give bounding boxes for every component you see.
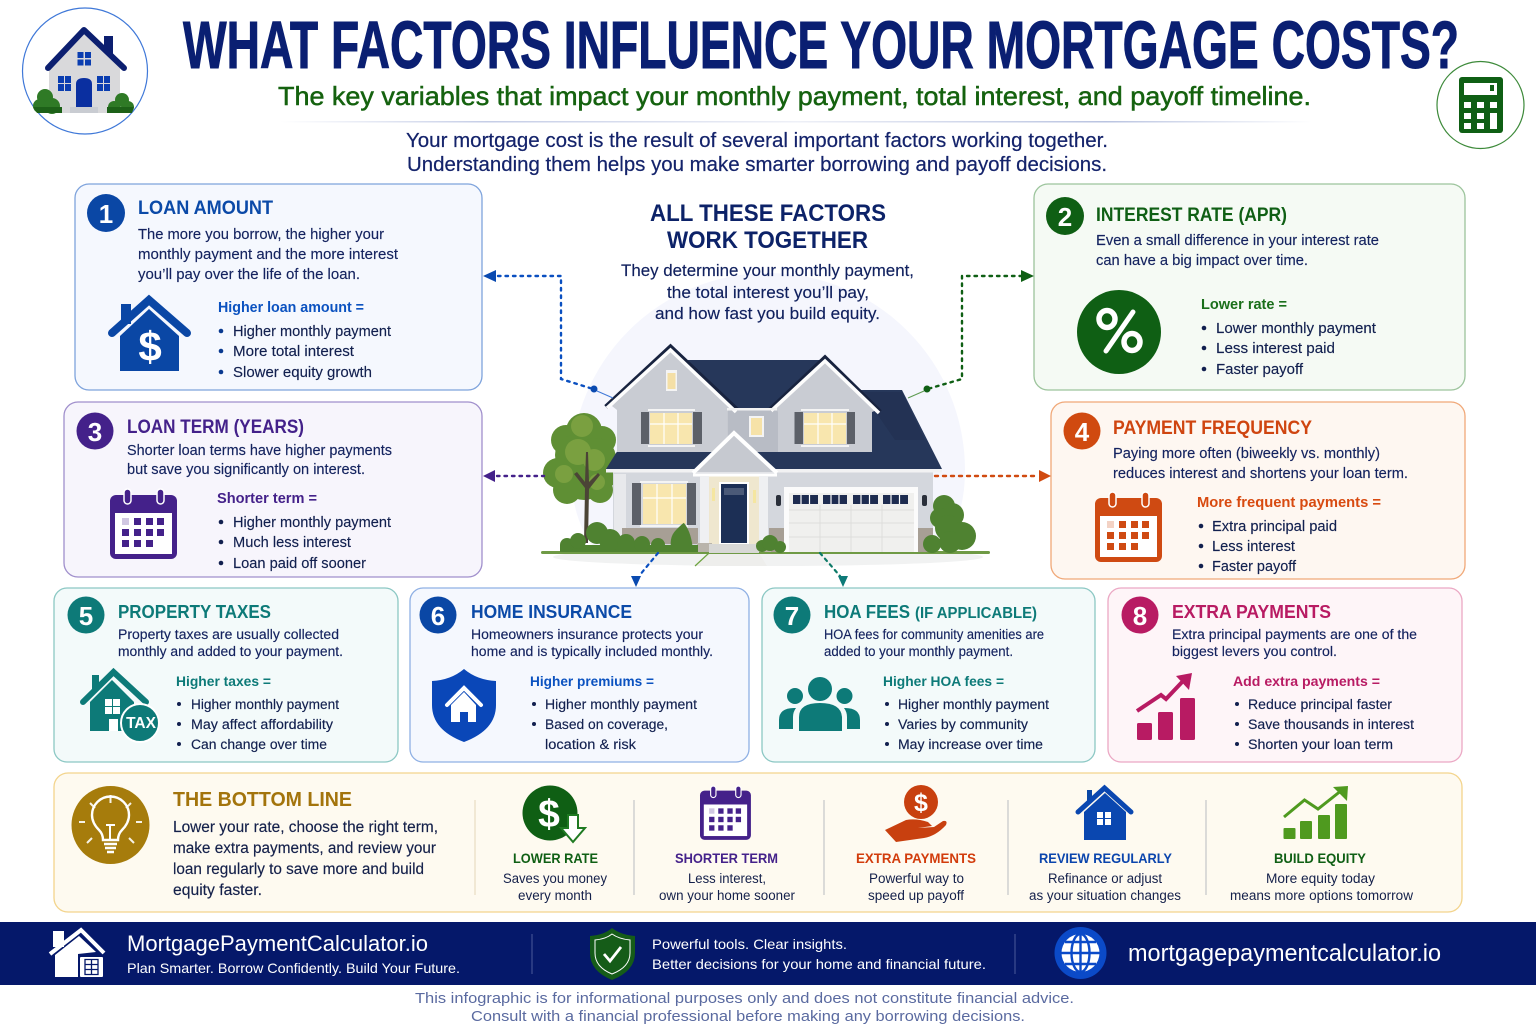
effects list: Shorter term = (217, 491, 317, 507)
effects list: Higher monthly payment (191, 697, 339, 712)
tip: review regularly: Refinance or adjust (1048, 871, 1162, 886)
number badge 2: 2 (1058, 202, 1072, 232)
effects list: Higher loan amount = (218, 300, 364, 316)
icon: rising bar chart (1137, 673, 1195, 740)
effects list: Extra principal paid (1212, 518, 1337, 535)
effects list (1197, 495, 1381, 575)
tip: shorter term: SHORTER TERM (675, 850, 778, 866)
icon: calculator in circle (1437, 62, 1524, 148)
tip: build equity: BUILD EQUITY (1274, 850, 1367, 866)
heading: property taxes: PROPERTY TAXES (118, 601, 271, 622)
icon: house with tax badge (83, 672, 159, 742)
disclaimer: This infographic is for informational purposes only and does not constitute financial advice. (415, 990, 1074, 1007)
footer message: Powerful tools. Clear insights. (652, 936, 847, 952)
porch (702, 476, 766, 544)
tip: extra payments: Powerful way to (869, 871, 964, 886)
panel: 6 home insurance (410, 588, 749, 762)
intro text: Your mortgage cost is the result of several important factors working together. (406, 130, 1108, 152)
tip: review regularly (1029, 788, 1181, 903)
intro text: Understanding them helps you make smarter borrowing and payoff decisions. (407, 154, 1107, 176)
description: Shorter loan terms have higher payments (127, 442, 392, 459)
description (127, 442, 392, 478)
description (1096, 232, 1379, 269)
tree (543, 413, 617, 543)
center heading and text: the total interest you’ll pay, (667, 284, 869, 302)
effects list: Less interest paid (1216, 340, 1335, 357)
icon: dollar with down arrow: $ (538, 793, 560, 836)
description (1172, 627, 1417, 659)
number badge 4: 4 (1075, 417, 1090, 447)
effects list: Can change over time (191, 737, 327, 752)
effects list: Faster payoff (1216, 361, 1304, 378)
brand name: MortgagePaymentCalculator.io (127, 931, 428, 956)
description: added to your monthly payment. (824, 644, 1013, 659)
website: mortgagepaymentcalculator.io (1128, 940, 1441, 967)
icon: footer house logo (50, 930, 104, 977)
arrow: house to payment frequency (935, 470, 1051, 482)
icon: blue house (1078, 788, 1131, 840)
description: The more you borrow, the higher your (138, 226, 384, 243)
intro text (406, 130, 1108, 176)
tip: extra payments (856, 785, 976, 903)
icon: house in circle (22, 8, 148, 134)
description: home and is typically included monthly. (471, 644, 713, 659)
tip: build equity (1230, 786, 1413, 903)
bottom line text: make extra payments, and review your (173, 840, 436, 857)
panel: the bottom line (54, 773, 1462, 912)
arrow: house to home insurance (631, 553, 658, 587)
tip: build equity: means more options tomorrow (1230, 888, 1413, 903)
tip: shorter term: Less interest, (688, 871, 766, 886)
tip: lower rate: LOWER RATE (513, 850, 598, 866)
heading: the bottom line: THE BOTTOM LINE (173, 788, 352, 811)
description: Extra principal payments are one of the (1172, 627, 1417, 642)
description (118, 627, 343, 659)
heading: extra payments: EXTRA PAYMENTS (1172, 601, 1331, 622)
effects list (176, 673, 339, 752)
description: biggest levers you control. (1172, 644, 1337, 659)
heading: hoa fees: (IF APPLICABLE) (915, 605, 1037, 622)
effects list (217, 491, 392, 572)
number badge 7 (774, 596, 810, 634)
upper walls (617, 408, 872, 452)
effects list: Varies by community (898, 717, 1028, 732)
description: Paying more often (biweekly vs. monthly) (1113, 445, 1380, 462)
lower walls (613, 472, 933, 552)
heading: interest rate: INTEREST RATE (APR) (1096, 205, 1287, 226)
effects list (1233, 673, 1414, 752)
effects list: Based on coverage, (545, 717, 668, 732)
icon: house with dollar (112, 300, 187, 371)
tip: shorter term: own your home sooner (659, 888, 795, 903)
effects list: Higher monthly payment (545, 697, 697, 712)
number badge 5: 5 (79, 601, 93, 631)
description: can have a big impact over time. (1096, 252, 1308, 269)
number badge 8 (1122, 596, 1158, 634)
bottom line text (173, 819, 438, 899)
center heading and text: They determine your monthly payment, (621, 262, 914, 280)
effects list (530, 673, 697, 752)
effects list: More frequent payments = (1197, 495, 1381, 511)
description (138, 226, 399, 283)
arrow: house to loan amount (483, 270, 613, 398)
tip: lower rate: every month (518, 888, 592, 903)
effects list: Add extra payments = (1233, 673, 1380, 689)
heading: loan term: LOAN TERM (YEARS) (127, 417, 304, 438)
description: monthly and added to your payment. (118, 644, 343, 659)
tip: lower rate: Saves you money (503, 871, 607, 886)
panel: 1 loan amount (75, 184, 482, 390)
arrow: house to hoa fees (820, 553, 848, 587)
tip: extra payments: speed up payoff (868, 888, 964, 903)
tip: review regularly: REVIEW REGULARLY (1039, 850, 1173, 866)
description: reduces interest and shortens your loan term. (1113, 465, 1408, 482)
number badge 1 (87, 194, 125, 232)
effects list: May increase over time (898, 737, 1043, 752)
heading: hoa fees: HOA FEES (824, 601, 910, 622)
description: but save you significantly on interest. (127, 461, 365, 478)
icon: green shield (590, 928, 635, 980)
footer message: Better decisions for your home and financial future. (652, 956, 986, 972)
icon: shield with house (432, 669, 496, 742)
effects list (883, 673, 1049, 752)
description: Property taxes are usually collected (118, 627, 339, 642)
icon: hand with coin: $ (914, 789, 928, 817)
effects list: Higher monthly payment (233, 514, 392, 531)
effects list: Higher monthly payment (898, 697, 1049, 712)
subtitle: The key variables that impact your monthly payment, total interest, and payoff timeline. (278, 81, 1311, 111)
icon: purple calendar (110, 489, 177, 559)
effects list: Shorten your loan term (1248, 737, 1393, 752)
heading: loan amount: LOAN AMOUNT (138, 198, 273, 219)
description (471, 627, 713, 659)
effects list: Save thousands in interest (1248, 717, 1414, 732)
effects list: Slower equity growth (233, 364, 372, 381)
center heading and text (621, 200, 914, 323)
effects list: Lower monthly payment (1216, 320, 1377, 337)
heading: hoa fees (824, 601, 1037, 622)
description: you’ll pay over the life of the loan. (138, 266, 360, 283)
panel: 5 property taxes (54, 588, 398, 762)
arrow: house to loan term (483, 470, 544, 482)
number badge 8: 8 (1133, 601, 1147, 631)
heading: payment frequency: PAYMENT FREQUENCY (1113, 418, 1312, 439)
tip: extra payments: EXTRA PAYMENTS (856, 850, 976, 866)
icon: light bulb (72, 786, 150, 864)
center heading and text: WORK TOGETHER (667, 227, 868, 254)
bottom line text: loan regularly to save more and build (173, 861, 424, 878)
icon: orange calendar (1095, 492, 1162, 562)
effects list: Much less interest (233, 534, 352, 551)
footer band (0, 922, 1536, 985)
icon: calendar small (700, 786, 751, 840)
bottom line text: equity faster. (173, 882, 262, 899)
effects list: Less interest (1212, 538, 1296, 555)
effects list: Higher taxes = (176, 673, 271, 689)
effects list: location & risk (545, 737, 636, 752)
icon: globe (1054, 927, 1106, 979)
tagline: Plan Smarter. Borrow Confidently. Build Your Future. (127, 960, 460, 976)
number badge 3: 3 (88, 417, 102, 447)
disclaimer (415, 990, 1074, 1024)
description: monthly payment and the more interest (138, 246, 399, 263)
number badge 6: 6 (431, 601, 445, 631)
garage (784, 487, 918, 552)
panel: 7 hoa fees (762, 588, 1095, 762)
panel: 2 interest rate (1034, 184, 1465, 390)
number badge 4 (1064, 412, 1100, 450)
effects list (218, 300, 392, 381)
number badge 2 (1046, 197, 1084, 235)
tip: review regularly: as your situation changes (1029, 888, 1181, 903)
description: Homeowners insurance protects your (471, 627, 704, 642)
description: Even a small difference in your interest rate (1096, 232, 1379, 249)
tip: build equity: More equity today (1266, 871, 1375, 886)
effects list: Faster payoff (1212, 558, 1297, 575)
windows upper (641, 370, 855, 447)
number badge 7: 7 (785, 601, 799, 631)
panel: 4 payment frequency (1051, 402, 1465, 579)
description (1113, 445, 1408, 482)
effects list (1201, 297, 1377, 378)
heading: home insurance: HOME INSURANCE (471, 601, 632, 622)
footer message (652, 936, 986, 972)
description: HOA fees for community amenities are (824, 627, 1044, 642)
illustration: house (541, 273, 990, 566)
effects list: More total interest (233, 343, 355, 360)
center heading and text: ALL THESE FACTORS (650, 200, 886, 227)
number badge 3 (76, 412, 114, 450)
effects list: Lower rate = (1201, 297, 1287, 313)
panel: 3 loan term (64, 402, 482, 577)
effects list: Higher monthly payment (233, 323, 392, 340)
arrow: house to interest rate (908, 270, 1034, 398)
icon: house with dollar: $ (138, 323, 162, 370)
bottom line text: Lower your rate, choose the right term, (173, 819, 438, 836)
tip: lower rate (503, 786, 607, 903)
effects list: Higher premiums = (530, 673, 654, 689)
effects list: Reduce principal faster (1248, 697, 1393, 712)
tip: shorter term (659, 786, 795, 903)
icon: house with tax badge: TAX (126, 715, 157, 732)
number badge 5 (68, 596, 104, 634)
effects list: Higher HOA fees = (883, 673, 1004, 689)
shrubs (560, 495, 976, 553)
description (824, 627, 1044, 659)
icon: green chart (1284, 786, 1348, 839)
center heading and text: and how fast you build equity. (655, 305, 880, 323)
effects list: Loan paid off sooner (233, 555, 366, 572)
icon: percent (1077, 290, 1161, 374)
icon: people (779, 677, 860, 731)
number badge 1: 1 (99, 199, 113, 229)
number badge 6 (420, 596, 456, 634)
panel: 8 extra payments (1108, 588, 1462, 762)
effects list: May affect affordability (191, 717, 333, 732)
